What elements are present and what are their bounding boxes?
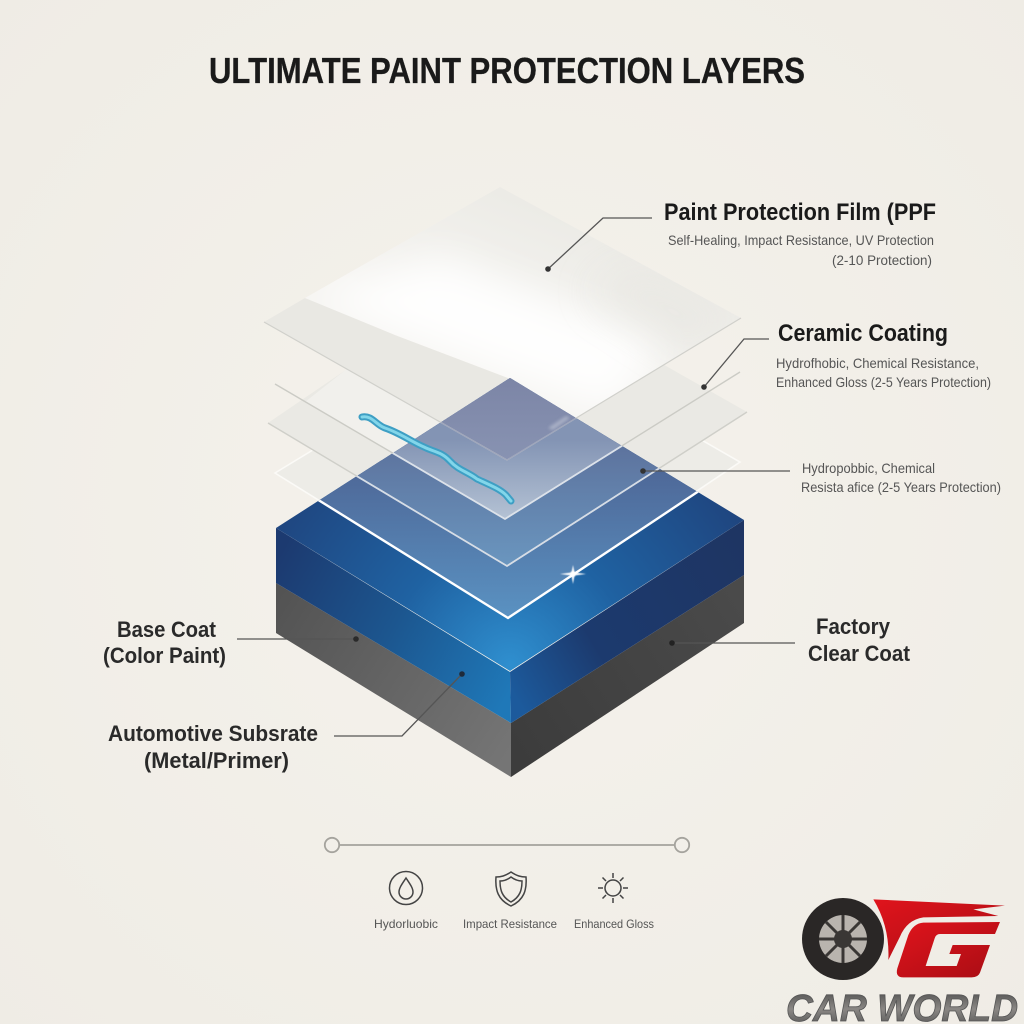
callout: paint protection film (545, 199, 936, 272)
callout: ceramic coating: Ceramic Coating (778, 320, 948, 347)
callout: factory clear coat: Clear Coat (808, 641, 911, 666)
icon: hydrophobic drop (390, 872, 422, 904)
layer: middle sheet (305, 335, 510, 519)
block: base and substrate (276, 378, 744, 777)
callout: factory clear coat (669, 614, 911, 666)
liquid ceramic bead (362, 417, 511, 501)
red G mark (873, 899, 1005, 977)
layer: lower clear film sheet (275, 330, 740, 618)
callout: factory clear coat: Factory (816, 614, 891, 639)
callout: third layer: Resista afice (2-5 Years Protection) (801, 479, 1001, 495)
substrate right face (511, 575, 744, 777)
substrate left face (276, 583, 511, 777)
callout: automotive substrate (108, 671, 465, 773)
blue top surface (276, 378, 744, 671)
callout: paint protection film: (2-10 Protection) (832, 252, 932, 268)
callout: paint protection film: Self-Healing, Impact Resistance, UV Protection (668, 232, 934, 248)
layer outlines on block (318, 418, 699, 620)
callout: automotive substrate: Automotive Subsrate (108, 721, 318, 746)
layer outlines on paper (264, 318, 747, 566)
callout: paint protection film: Paint Protection Film (PPF (664, 199, 936, 226)
film fold shade (264, 298, 508, 460)
wheel (802, 898, 884, 980)
sparkle (560, 565, 586, 584)
label: enhanced gloss: Enhanced Gloss (574, 917, 654, 931)
callout: ceramic coating: Enhanced Gloss (2-5 Years Protection) (776, 374, 991, 390)
layer: paint protection film (305, 187, 741, 460)
layered paint diagram (264, 250, 748, 777)
icon: gloss sun (598, 873, 628, 903)
film highlight (370, 262, 643, 390)
layer: ceramic sheet (268, 283, 747, 566)
callout: automotive substrate: (Metal/Primer) (144, 748, 289, 773)
blue left face (276, 528, 511, 723)
callout: base coat (103, 617, 359, 668)
icon: impact shield (496, 872, 526, 906)
tinted layer areas over block (319, 378, 697, 616)
callout: third layer: Hydropobbic, Chemical (802, 460, 935, 476)
logo: G car world (786, 898, 1018, 1024)
callout: base coat: (Color Paint) (103, 643, 226, 668)
callout: base coat: Base Coat (117, 617, 217, 642)
callout: ceramic coating: Hydrofhobic, Chemical Resistance, (776, 355, 979, 371)
blue right face (510, 520, 744, 723)
title: ULTIMATE PAINT PROTECTION LAYERS (209, 50, 805, 91)
label: impact resistance: Impact Resistance (463, 917, 557, 931)
callout: ceramic coating (701, 320, 991, 390)
callout: third layer (640, 460, 1001, 495)
timeline slider (325, 838, 689, 852)
label: hydrophobic: Hydorluobic (374, 917, 438, 931)
